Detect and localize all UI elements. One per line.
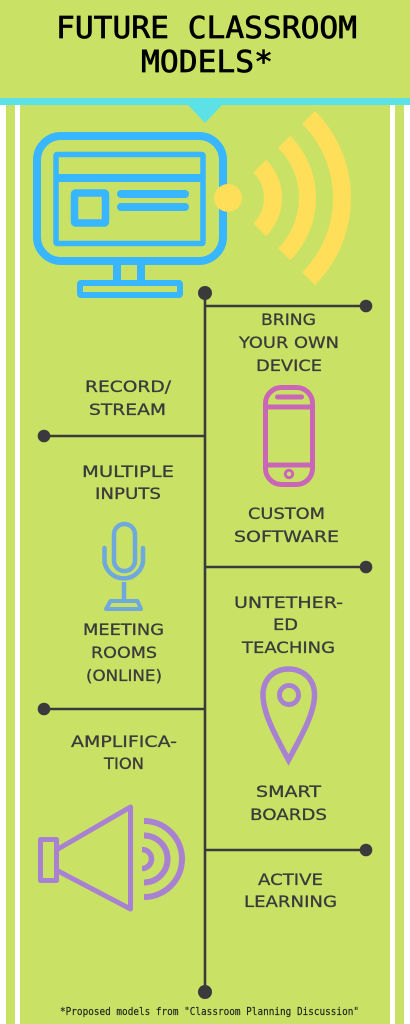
label: multiple inputs bbox=[82, 462, 174, 503]
label: multiple inputs: MULTIPLE bbox=[82, 462, 174, 481]
label: bring your own device: DEVICE bbox=[256, 356, 322, 375]
timeline bbox=[38, 286, 372, 999]
label: untethered teaching: UNTETHER- bbox=[234, 593, 343, 612]
icon: monitor bbox=[37, 136, 223, 295]
cyan banner with pointer bbox=[0, 98, 410, 123]
label: custom software: SOFTWARE bbox=[234, 527, 339, 546]
icon: speaker bbox=[40, 807, 182, 909]
label: active learning: LEARNING bbox=[244, 892, 337, 911]
label: record/stream bbox=[85, 377, 172, 419]
title: MODELS* bbox=[141, 45, 273, 80]
label: record/stream: RECORD/ bbox=[85, 377, 172, 396]
label: amplification: TION bbox=[103, 754, 144, 773]
label: bring your own device bbox=[238, 310, 339, 375]
label: active learning bbox=[244, 870, 337, 911]
icon: smartphone bbox=[265, 388, 313, 484]
label: smart boards: BOARDS bbox=[250, 805, 327, 824]
label: custom software: CUSTOM bbox=[248, 504, 325, 523]
label: custom software bbox=[234, 504, 339, 546]
label: untethered teaching: ED bbox=[273, 615, 298, 634]
title bbox=[56, 11, 357, 80]
label: bring your own device: YOUR OWN bbox=[238, 333, 339, 352]
label: untethered teaching: TEACHING bbox=[241, 638, 335, 657]
label: meeting rooms online: ROOMS bbox=[91, 643, 157, 662]
label: smart boards: SMART bbox=[256, 782, 321, 801]
header panel bbox=[0, 0, 410, 98]
label: meeting rooms online bbox=[83, 620, 164, 685]
label: meeting rooms online: (ONLINE) bbox=[86, 666, 162, 685]
label: amplification: AMPLIFICA- bbox=[71, 732, 177, 751]
icon: location pin bbox=[263, 669, 314, 760]
label: multiple inputs: INPUTS bbox=[95, 484, 161, 503]
label: record/stream: STREAM bbox=[89, 400, 166, 419]
label: amplification bbox=[71, 732, 177, 773]
icon: wifi signal bbox=[214, 117, 342, 279]
label: smart boards bbox=[250, 782, 327, 824]
label: bring your own device: BRING bbox=[261, 310, 316, 329]
title: FUTURE CLASSROOM bbox=[56, 11, 357, 46]
icon: microphone bbox=[104, 524, 143, 609]
label: untethered teaching bbox=[234, 593, 343, 657]
label: active learning: ACTIVE bbox=[258, 870, 323, 889]
label: meeting rooms online: MEETING bbox=[83, 620, 164, 639]
footnote: *Proposed models from "Classroom Planning Discussion" bbox=[60, 1006, 359, 1018]
